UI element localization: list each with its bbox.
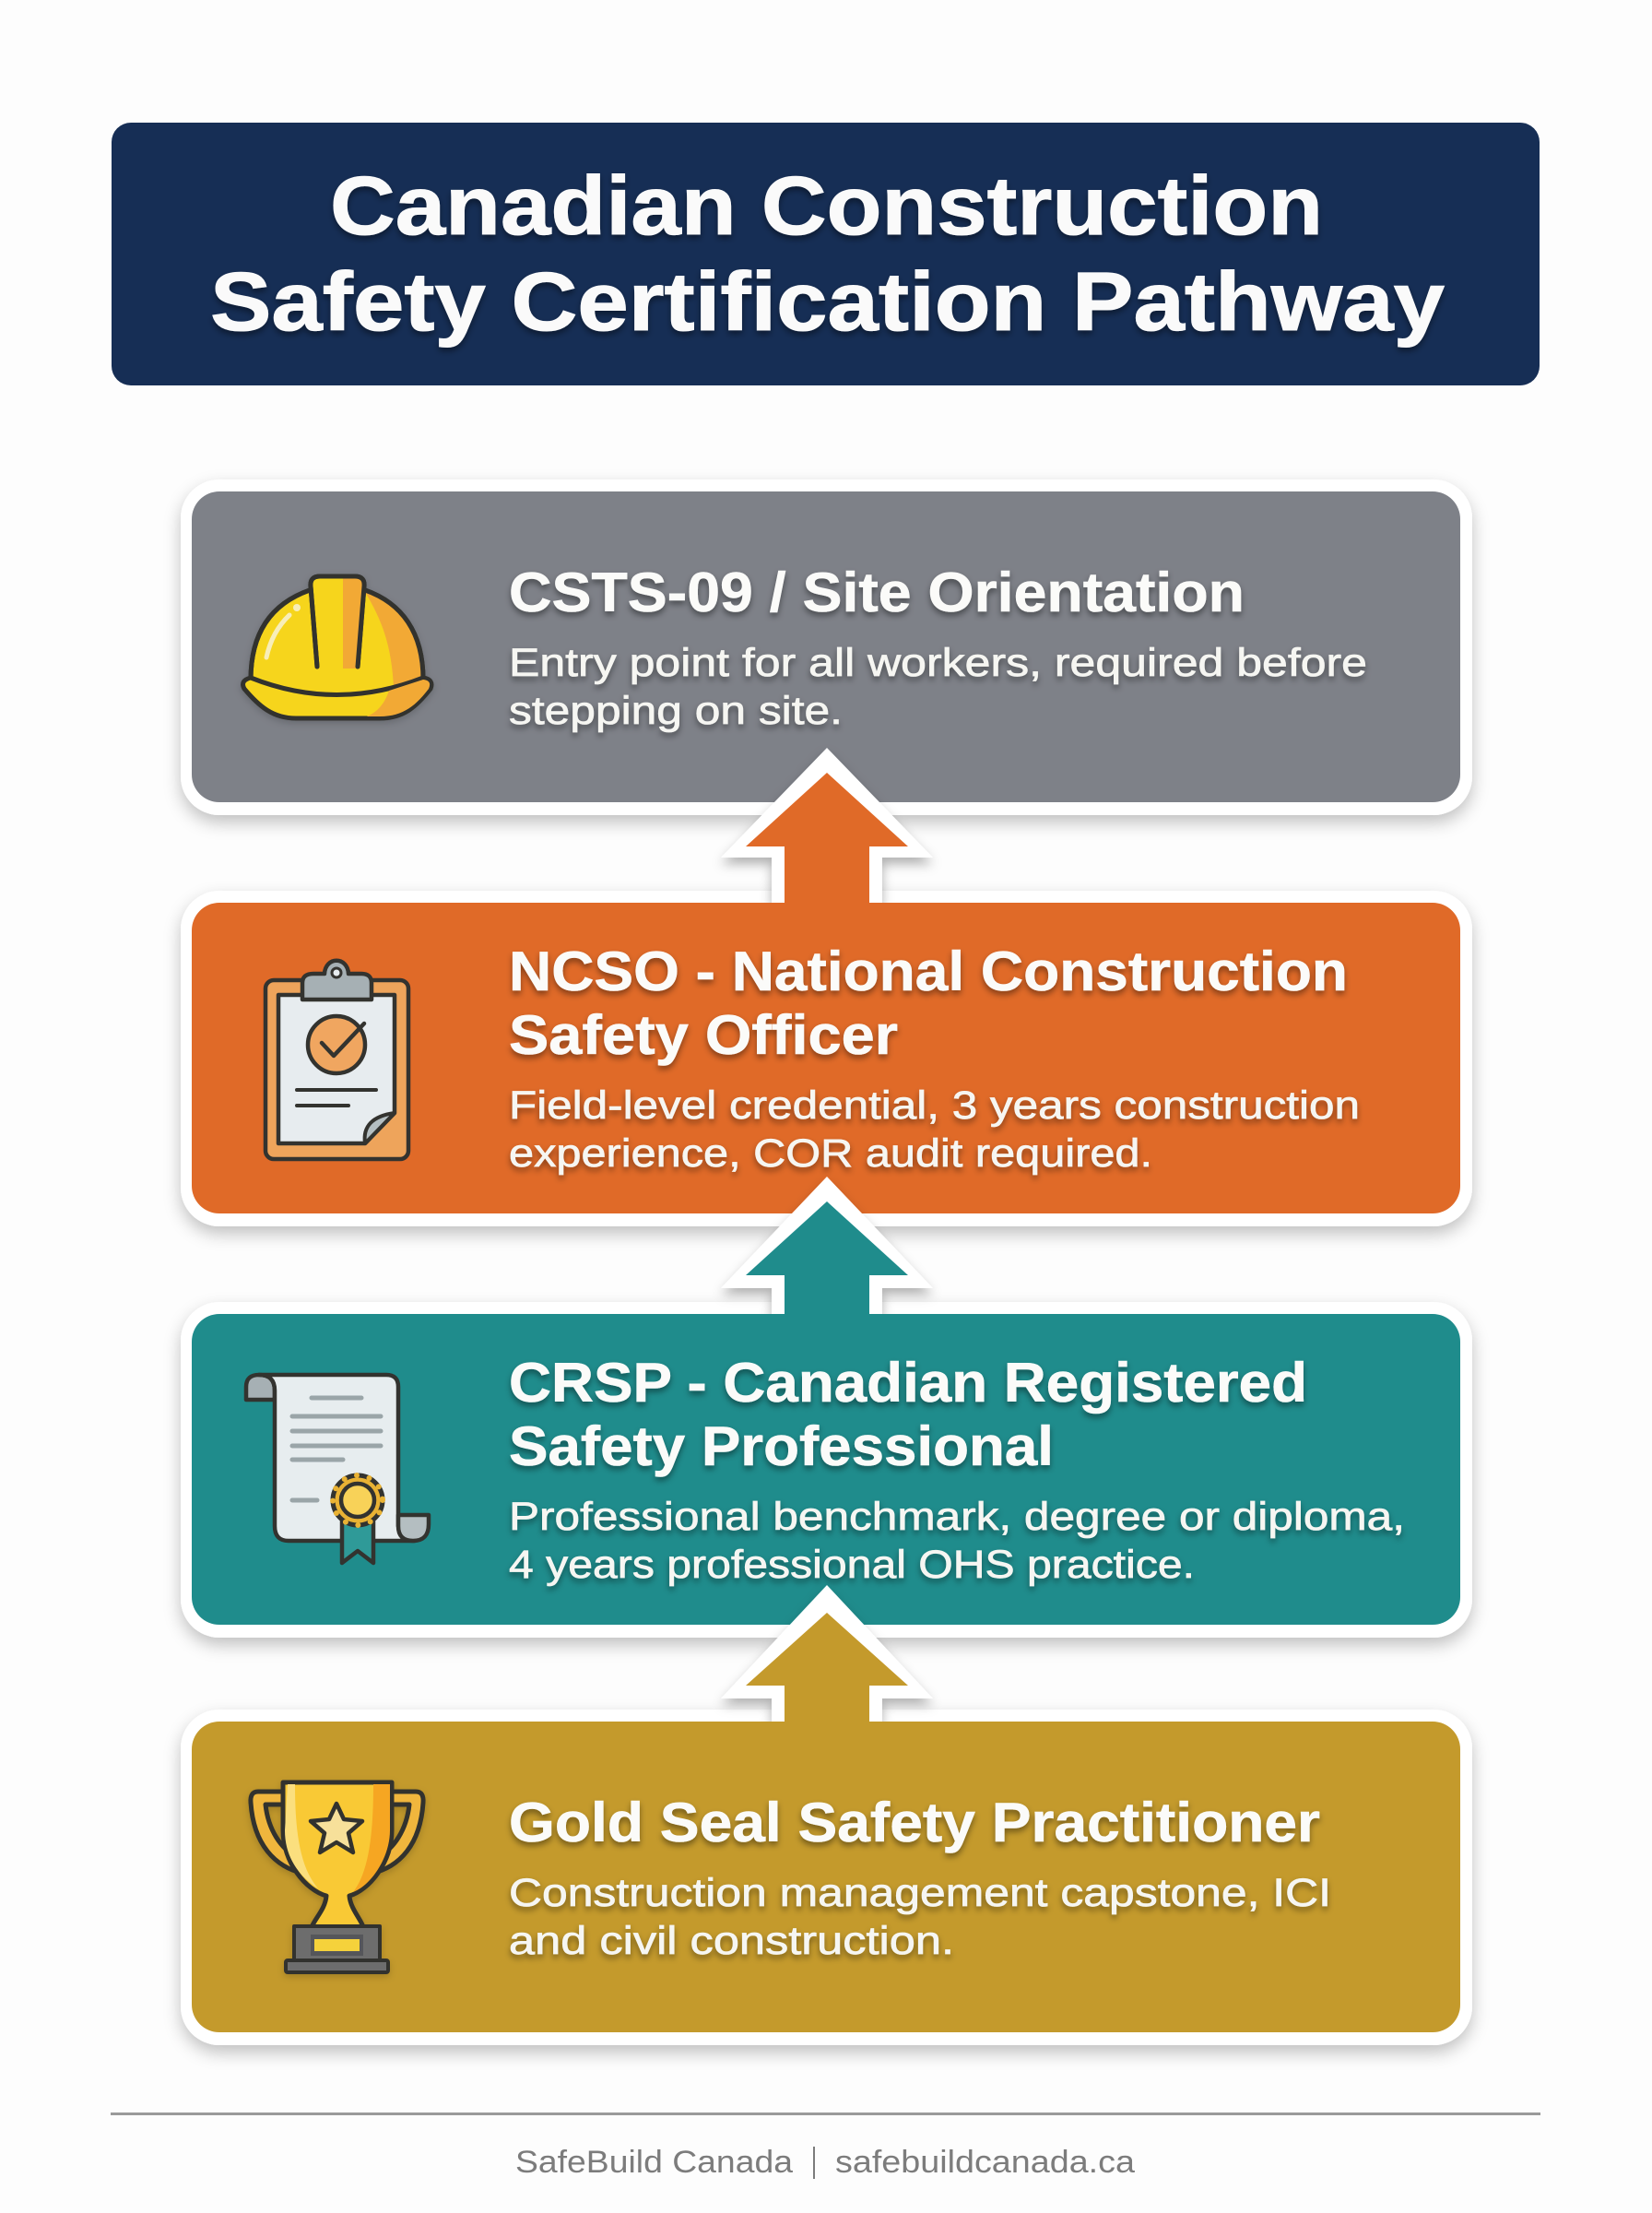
title banner <box>112 123 1540 385</box>
card description: and civil construction. <box>509 1919 954 1963</box>
arrow: NCSO to CRSP <box>721 1177 933 1319</box>
card description: Entry point for all workers, required before <box>509 641 1367 685</box>
panel: CSTS-09 / Site Orientation <box>181 479 1472 815</box>
card description <box>509 1871 1331 1963</box>
title: Canadian Construction <box>330 160 1323 253</box>
card description: experience, COR audit required. <box>509 1131 1152 1176</box>
card heading: Gold Seal Safety Practitioner <box>509 1792 1320 1853</box>
icon: clipboard <box>266 961 408 1159</box>
card heading: NCSO - National Construction <box>509 941 1348 1002</box>
footer <box>515 2145 1135 2180</box>
arrow: CRSP to Gold Seal <box>721 1585 933 1726</box>
panel: CRSP <box>181 1302 1472 1638</box>
card description: Professional benchmark, degree or diploma, <box>509 1495 1405 1539</box>
arrow: CSTS to NCSO <box>721 748 933 908</box>
footer: safebuildcanada.ca <box>835 2145 1135 2180</box>
card heading: CRSP - Canadian Registered <box>509 1352 1307 1414</box>
title <box>210 160 1445 349</box>
icon: trophy <box>251 1782 423 1972</box>
card description: stepping on site. <box>509 689 843 733</box>
panel: Gold Seal <box>181 1710 1472 2045</box>
card description <box>509 1495 1405 1587</box>
card description <box>509 641 1367 733</box>
card description: Construction management capstone, ICI <box>509 1871 1331 1915</box>
card heading <box>509 1352 1307 1477</box>
icon: certificate <box>246 1375 429 1563</box>
card description <box>509 1083 1360 1176</box>
card heading <box>509 941 1348 1066</box>
card heading: CSTS-09 / Site Orientation <box>509 562 1245 623</box>
card description: 4 years professional OHS practice. <box>509 1543 1195 1587</box>
card heading: Safety Officer <box>509 1004 898 1066</box>
title: Safety Certification Pathway <box>210 256 1445 349</box>
footer: SafeBuild Canada <box>515 2145 793 2180</box>
card description: Field-level credential, 3 years construction <box>509 1083 1360 1128</box>
icon: hard hat <box>243 576 431 718</box>
card heading: Safety Professional <box>509 1415 1054 1477</box>
panel: NCSO <box>181 891 1472 1226</box>
